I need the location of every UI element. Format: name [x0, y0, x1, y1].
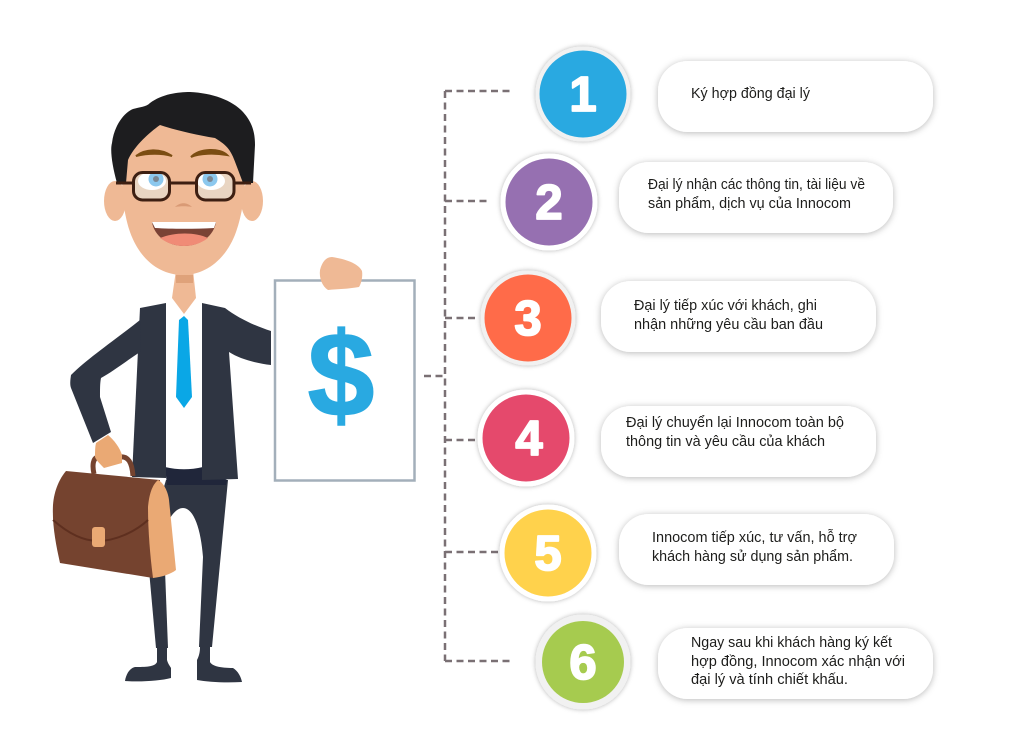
eyes	[134, 172, 233, 200]
card 2: Đại lý nhận các thông tin, tài liệu về	[648, 176, 865, 193]
neck shadow	[176, 275, 193, 283]
ear left	[104, 181, 126, 221]
badge 1: 1	[569, 68, 597, 122]
dollar sign: $	[308, 308, 374, 442]
belt	[165, 467, 227, 485]
card 5: Innocom tiếp xúc, tư vấn, hỗ trợ	[652, 529, 857, 546]
briefcase with hand	[53, 435, 176, 578]
hand	[95, 435, 122, 468]
card 6	[658, 628, 933, 699]
hand on board	[320, 257, 362, 290]
card 6: đại lý và tính chiết khấu.	[691, 671, 848, 688]
badge 3	[480, 270, 576, 366]
card 4: thông tin và yêu cầu của khách	[626, 433, 825, 450]
badge 5	[500, 504, 596, 602]
character: businessman	[70, 92, 271, 682]
card 4	[601, 406, 876, 477]
badge 5: 5	[534, 527, 562, 581]
mouth	[152, 222, 216, 246]
face	[122, 118, 245, 275]
card 2: sản phẩm, dịch vụ của Innocom	[648, 195, 851, 212]
jacket left panel	[132, 303, 166, 478]
left shoe	[125, 647, 171, 681]
card 6: Ngay sau khi khách hàng ký kết	[691, 634, 893, 651]
tie	[176, 316, 192, 408]
connector lines	[424, 91, 513, 661]
card 3: Đại lý tiếp xúc với khách, ghi	[634, 297, 817, 314]
clasp	[92, 527, 105, 547]
money sign board	[275, 257, 414, 480]
badge 6	[536, 614, 630, 710]
step 4	[478, 390, 876, 486]
card 3	[601, 281, 876, 352]
shirt	[165, 300, 203, 470]
card 2	[619, 162, 893, 233]
badge 3: 3	[514, 292, 542, 346]
card 1	[658, 61, 933, 132]
case body	[53, 471, 160, 578]
glasses	[116, 172, 251, 200]
badge 1	[536, 46, 630, 142]
neck	[172, 270, 196, 314]
teeth	[152, 222, 216, 229]
trousers	[160, 480, 228, 647]
tongue	[160, 234, 208, 246]
step 2	[500, 154, 893, 250]
card 3: nhận những yêu cầu ban đầu	[634, 316, 823, 333]
step 3	[480, 270, 876, 366]
step 6	[536, 614, 933, 710]
card 5: khách hàng sử dụng sản phẩm.	[652, 548, 853, 565]
ear right	[241, 181, 263, 221]
left leg	[149, 570, 168, 648]
handle	[93, 457, 133, 476]
board	[275, 280, 414, 480]
card 6: hợp đồng, Innocom xác nhận với	[691, 653, 905, 670]
badge 6: 6	[569, 636, 597, 690]
jacket right panel with sleeve	[202, 303, 271, 480]
badge 4: 4	[515, 412, 543, 466]
badge 2: 2	[535, 176, 563, 230]
card 4: Đại lý chuyển lại Innocom toàn bộ	[626, 414, 844, 431]
hair	[111, 92, 255, 183]
flap line	[53, 520, 148, 541]
case side	[148, 480, 176, 578]
card 5	[619, 514, 894, 585]
badge 2	[500, 154, 598, 250]
step 5	[500, 504, 894, 602]
left arm	[70, 308, 141, 443]
card 1: Ký hợp đồng đại lý	[691, 85, 810, 102]
eyebrows	[136, 150, 227, 157]
right shoe	[197, 647, 242, 682]
badge 4	[478, 390, 574, 486]
nose	[175, 203, 192, 207]
step 1	[536, 46, 933, 142]
